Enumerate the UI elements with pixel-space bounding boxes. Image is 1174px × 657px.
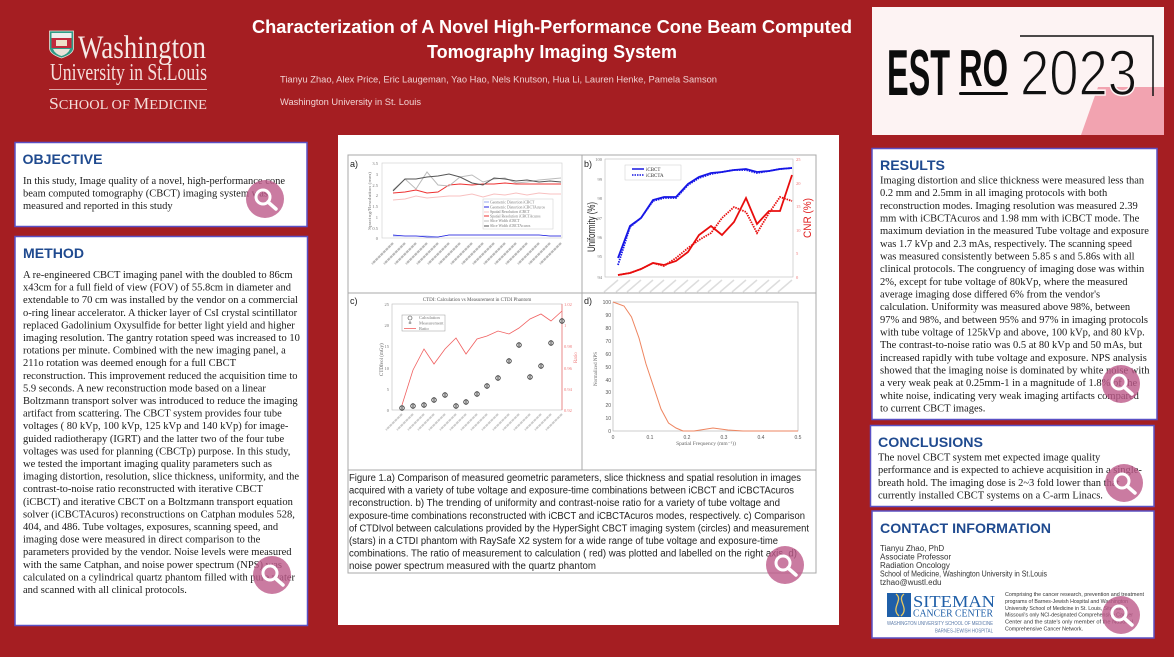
contact details: Associate Professor	[880, 552, 951, 562]
chart a: geometric parameters: Slice Width iCBCTAcuros	[490, 224, 531, 228]
logo: ESTRO 2023	[872, 7, 1164, 135]
heading: conclusions: CONCLUSIONS	[878, 434, 983, 450]
chart d: noise power spectrum	[584, 296, 802, 447]
logo: Siteman Cancer Center: CANCER CENTER	[913, 608, 993, 620]
icon: magnifier, objective	[246, 180, 284, 218]
figure caption: combinations. The ratio of measurement to calculation ( red) was plotted and labelled on the right axis. d)	[349, 549, 797, 560]
contact details: Radiation Oncology	[880, 561, 950, 570]
chart d: noise power spectrum: 60	[605, 352, 611, 358]
icon: magnifier, contact	[1102, 596, 1140, 634]
chart a: geometric parameters: Geometric Distortion iCBCTAcuros	[490, 206, 545, 210]
chart a: geometric parameters: Spatial Resolution iCBCT	[490, 210, 531, 214]
chart d: noise power spectrum: 90	[605, 313, 611, 319]
results text: to current CBCT images.	[880, 404, 985, 415]
objective text: measured and reported in this study	[23, 201, 173, 212]
results text: calculation. Uniformity was measured above 98%, between	[880, 302, 1131, 313]
chart a: geometric parameters: 1.5	[372, 204, 379, 209]
chart c: CTDI calculation vs measurement: 20	[384, 323, 390, 328]
method text: reconstruction. This improvement reduced the acquisition time to	[23, 371, 298, 382]
heading: results: RESULTS	[880, 157, 945, 173]
results text: 97% and 98%, and between 95% and 97% in imaging protocols	[880, 315, 1148, 326]
chart c: CTDI calculation vs measurement: 0	[387, 408, 390, 413]
results text: 2%, except for tube voltage of 80kVp, where the measured	[880, 277, 1128, 288]
results text: with tube voltage of 125kVp and above, 100 kVp, and 80 kVp.	[880, 328, 1145, 339]
chart c: CTDI calculation vs measurement	[350, 296, 579, 430]
Siteman description: Comprehensive Cancer Network.	[1005, 626, 1083, 632]
chart c: CTDI calculation vs measurement: 5	[387, 387, 390, 392]
method text: (iCBCT) and iterative CBCT on a Boltzmann transport equation	[23, 497, 294, 508]
chart b: uniformity and CNR	[584, 157, 814, 292]
chart b: uniformity and CNR: Uniformity (%)	[586, 202, 598, 252]
chart b: uniformity and CNR: 98	[598, 196, 603, 201]
chart d: noise power spectrum: 20	[605, 403, 611, 409]
results text: 0.2 mm and 2.5mm in all imaging protocols with both	[880, 188, 1108, 199]
chart c: CTDI calculation vs measurement: Ratio	[419, 326, 429, 331]
panel: method	[15, 236, 308, 626]
logo: Siteman Cancer Center: SITEMAN	[913, 592, 995, 611]
chart d: noise power spectrum: 0.3	[721, 435, 728, 441]
title: Tomography Imaging System	[427, 42, 677, 62]
icon: magnifier, conclusions	[1105, 464, 1143, 502]
method text: 5.9 seconds. A new reconstruction mode based on a linear	[23, 383, 266, 394]
chart a: geometric parameters: Spacing/Resolution (mm)	[367, 171, 372, 230]
chart d: noise power spectrum: 0.1	[647, 435, 654, 441]
chart b: uniformity and CNR: 20	[796, 181, 801, 186]
figure caption: reconstruction. b) The trending of uniformity and contrast-noise ratio for a variety of tube voltage and	[349, 498, 780, 509]
icon: magnifier, method	[253, 556, 291, 594]
chart c: CTDI calculation vs measurement: CTDIvol (mGy)	[380, 343, 385, 376]
results text: was measured consistently between 5.85 s and 5.86s with all	[880, 252, 1135, 263]
method text: we tested the important imaging quality parameters such as	[23, 459, 272, 470]
method text: Boltzmann transport solver was introduced to reduce the imaging	[23, 396, 298, 407]
authors: Tianyu Zhao, Alex Price, Eric Laugeman, Yao Hao, Nels Knutson, Hua Li, Lauren Henke, Pamela Samson	[280, 74, 717, 84]
chart c: CTDI calculation vs measurement: 10	[384, 366, 390, 371]
chart d: noise power spectrum: 0.4	[758, 435, 765, 441]
Siteman description: Missouri's only NCI-designated Comprehensive Cancer	[1005, 612, 1133, 618]
chart c: CTDI calculation vs measurement: Calculation	[419, 315, 440, 320]
chart b: uniformity and CNR: iCBCTA	[646, 174, 664, 179]
chart d: noise power spectrum: 0.5	[795, 435, 802, 441]
chart c: CTDI calculation vs measurement: c)	[350, 296, 358, 306]
figure caption: Figure 1.a) Comparison of measured geometric parameters, slice thickness and spatial resolution in images	[349, 473, 801, 484]
conclusions text: breath hold. The imaging dose is 2~3 fold lower than that	[878, 478, 1119, 489]
method text: imaging dose were measured in direct comparison to the	[23, 535, 261, 546]
chart b: uniformity and CNR: 96	[598, 235, 603, 240]
logo: ESTRO 2023: RO	[959, 40, 1008, 98]
logo: Siteman Cancer Center: BARNES-JEWISH HOSPITAL	[935, 628, 993, 634]
heading: objective: OBJECTIVE	[22, 151, 102, 167]
chart d: noise power spectrum: 40	[605, 378, 611, 384]
chart b: uniformity and CNR: 94	[598, 275, 603, 280]
chart c: CTDI calculation vs measurement: 0.94	[564, 387, 573, 392]
chart d: noise power spectrum: Normalized NPS	[594, 352, 599, 386]
chart a: geometric parameters	[350, 159, 562, 264]
chart a: geometric parameters: a)	[350, 159, 358, 169]
figure caption: of CTDIvol between calculations provided by the HyperSight CBCT imaging system (circles) and measurement	[349, 523, 809, 534]
chart c: CTDI calculation vs measurement: 0.92	[564, 408, 572, 413]
chart d: noise power spectrum: 50	[605, 365, 611, 371]
method text: A re-engineered CBCT imaging panel with the doubled to 86cm	[23, 270, 293, 281]
chart c: CTDI calculation vs measurement: CTDI: Calculation vs Measurement in CTDI Phantom	[423, 298, 531, 303]
method text: imaging distortion, resolution, slice thickness, uniformity, and the	[23, 472, 299, 483]
contact details: tzhao@wustl.edu	[880, 578, 942, 587]
method text: imaging resolution. The gantry rotation speed was increased to 10	[23, 333, 300, 344]
chart b: uniformity and CNR: 97	[598, 216, 603, 221]
chart b: uniformity and CNR: 99	[598, 177, 603, 182]
conclusions text: performance and is expected to achieve acquisition in a single-	[878, 465, 1142, 476]
chart c: CTDI calculation vs measurement: 25	[384, 302, 390, 307]
figure caption: noise power spectrum measured with the quartz phantom	[349, 561, 596, 572]
figure caption: acquired with a variety of tube voltage and exposure-time combinations between iCBCT and iCBCTAcuros	[349, 486, 794, 497]
contact details: Tianyu Zhao, PhD	[880, 544, 944, 553]
method text: o-ring linear accelerator. A thicker layer of CsI crystal scintillator	[23, 308, 298, 319]
icon: magnifier, figure	[766, 546, 804, 584]
conclusions text: The novel CBCT system met expected image quality	[878, 452, 1101, 464]
results text: The contrast-to-noise ratio was 0.5 at 80 kVp and 50 mAs, but	[880, 340, 1142, 351]
method text: with the same Catphan, and noise power spectrum (NPS) was	[23, 560, 282, 571]
results text: increased rapidly with tube voltage and exposure. NPS analysis	[880, 353, 1147, 364]
logo: Siteman Cancer Center	[887, 592, 995, 634]
method text: solver (iCBCTAcuros) reconstructions on Catphan modules 528,	[23, 509, 295, 520]
logo: ESTRO 2023: EST	[887, 36, 950, 109]
method text: guided radiotherapy (IGRT) and the latter two of the four tube	[23, 434, 285, 445]
chart a: geometric parameters: 0.5	[372, 226, 379, 231]
method text: and scanned with all clinical protocols.	[23, 585, 187, 596]
results text: reconstruction modes. Imaging resolution was measured 2.39	[880, 201, 1138, 212]
figure caption: (stars) in a CTDI phantom with RaySafe X2 system for a wide range of tube voltage and exposure-time	[349, 536, 778, 547]
results text: a very weak peak at 0.25mm-1 in a magnitude of 1.8% of the	[880, 378, 1138, 389]
results text: white noise, indicating very weak imaging artifacts compared	[880, 391, 1140, 402]
chart d: noise power spectrum: 0	[612, 435, 615, 441]
chart a: geometric parameters: 1	[376, 215, 378, 220]
chart a: geometric parameters: 2.5	[372, 183, 379, 188]
method text: artifact from scattering. The CBCT system provides four tube	[23, 409, 282, 420]
title: Characterization of A Novel High-Performance Cone Beam Computed	[252, 17, 852, 37]
chart d: noise power spectrum: 70	[605, 339, 611, 345]
results text: was 1.7 kVp and 2.3 mAs, respectively. The scanning speed	[880, 239, 1133, 250]
chart b: uniformity and CNR: 0	[796, 275, 799, 280]
Siteman description: Comprising the cancer research, prevention and treatment	[1005, 592, 1145, 598]
method text: rotations per minute. Combined with the new imaging panel, a	[23, 346, 286, 357]
method text: 211o rotation was deemed enough for a full CBCT	[23, 358, 237, 369]
objective text: In this study, Image quality of a novel, high-performance cone	[23, 176, 285, 187]
title	[252, 17, 852, 62]
chart c: CTDI calculation vs measurement: Measurement	[419, 320, 444, 326]
chart c: CTDI calculation vs measurement: Ratio	[574, 352, 579, 363]
Siteman description: Center and the state's only member of the National	[1005, 620, 1133, 626]
logo: Siteman Cancer Center: WASHINGTON UNIVERSITY SCHOOL OF MEDICINE	[887, 621, 994, 627]
logo: Washington University School of Medicine: University in St.Louis	[50, 60, 207, 86]
chart c: CTDI calculation vs measurement: 0.96	[564, 366, 573, 371]
chart b: uniformity and CNR: iCBCT	[646, 168, 660, 173]
chart b: uniformity and CNR: 100	[595, 157, 603, 162]
heading: contact information: CONTACT INFORMATION	[880, 520, 1051, 536]
contact details: School of Medicine, Washington University in St.Louis	[880, 570, 1047, 578]
chart d: noise power spectrum: 100	[603, 300, 611, 306]
results text: mm with iCBCTAcuros and 1.98 mm with iCBCT mode. The	[880, 214, 1140, 225]
chart c: CTDI calculation vs measurement: 15	[384, 344, 390, 349]
chart d: noise power spectrum: Spatial Frequency (mm⁻¹))	[676, 440, 736, 447]
logo: ESTRO 2023: 2023	[1020, 37, 1137, 109]
chart d: noise power spectrum: 0	[608, 429, 611, 435]
logo: Washington University School of Medicine	[49, 30, 207, 113]
panel: results	[872, 148, 1157, 420]
method text: replaced Gadolinium Oxysulfide for better light yield and higher	[23, 320, 295, 331]
Siteman description: University School of Medicine in St. Louis, Siteman is	[1005, 606, 1128, 612]
results text: maximum deviation in the measured Tube voltage and exposure	[880, 226, 1149, 237]
method text: x43cm for a full field of view (FOV) of 55.8cm in diameter and	[23, 283, 292, 294]
panel: conclusions	[870, 426, 1154, 506]
affiliation: Washington University in St. Louis	[280, 97, 422, 107]
conclusions text: currently installed CBCT systems on a C-arm Linacs.	[878, 491, 1103, 502]
chart a: geometric parameters: Geometric Distortion iCBCT	[490, 200, 535, 204]
icon: university shield	[50, 31, 74, 58]
logo: Washington University School of Medicine: SCHOOL OF MEDICINE	[49, 94, 207, 113]
panel: figure	[338, 135, 839, 625]
chart d: noise power spectrum: 0.2	[684, 435, 691, 441]
objective text: beam computed tomography (CBCT) imaging system was	[23, 189, 268, 200]
results text: showed that the imaging noise is dominated by white noise with	[880, 366, 1150, 377]
method text: parameters provided by the vendor. Noise levels were measured	[23, 547, 292, 558]
chart c: CTDI calculation vs measurement: 1.02	[564, 302, 572, 307]
panel: contact information	[872, 511, 1154, 638]
figure caption: exposure-time combinations reconstructed with iCBCT and iCBCTAcuros modes, respectively. c) Comparison	[349, 511, 805, 522]
chart d: noise power spectrum: 10	[605, 416, 611, 422]
results text: Imaging distortion and slice thickness were measured less than	[880, 176, 1145, 186]
panel: objective	[15, 142, 307, 226]
chart b: uniformity and CNR: b)	[584, 159, 592, 169]
icon: magnifier, results	[1102, 365, 1140, 403]
chart d: noise power spectrum: 30	[605, 390, 611, 396]
results text: average imaging dose differed 6% from the vendor's	[880, 290, 1100, 301]
Siteman description: programs of Barnes-Jewish Hospital and Washington	[1005, 599, 1128, 605]
results text: clinical protocols. The congruency of imaging dose was within	[880, 264, 1145, 275]
chart a: geometric parameters: 2	[376, 193, 378, 198]
method text: extendable to 70 cm was installed by the vendor on a commercial	[23, 295, 298, 306]
heading: method: METHOD	[23, 245, 84, 261]
chart b: uniformity and CNR: CNR (%)	[802, 198, 814, 238]
chart d: noise power spectrum: d)	[584, 296, 592, 306]
chart b: uniformity and CNR: 95	[598, 254, 603, 259]
chart c: CTDI calculation vs measurement: 1	[564, 323, 566, 328]
chart a: geometric parameters: Slice Width iCBCT	[490, 219, 520, 223]
chart b: uniformity and CNR: 5	[796, 251, 799, 256]
chart a: geometric parameters: 0	[376, 236, 379, 241]
chart d: noise power spectrum: 80	[605, 326, 611, 332]
logo: Washington University School of Medicine: Washington	[78, 30, 206, 66]
method text: calculated on a cylindrical quartz phantom filled with pure water	[23, 572, 296, 583]
chart c: CTDI calculation vs measurement: 0.98	[564, 344, 573, 349]
chart b: uniformity and CNR: 25	[796, 157, 801, 162]
method text: contrast-to-noise ratio reconstructed with iterative CBCT	[23, 484, 264, 495]
method text: voltages was used for planning (CBCTp) purpose. In this study,	[23, 446, 290, 457]
chart a: geometric parameters: Spatial Resolution iCBCTAcuros	[490, 214, 541, 218]
method text: voltages ( 80 kVp, 100 kVp, 125 kVp and 140 kVp) for image-	[23, 421, 289, 432]
chart b: uniformity and CNR: 10	[796, 228, 801, 233]
method text: 404, and 486. Tube voltages, exposures, scanning speed, and	[23, 522, 279, 533]
chart b: uniformity and CNR: 15	[796, 204, 801, 209]
chart a: geometric parameters: 3.5	[372, 161, 379, 166]
chart a: geometric parameters: 3	[376, 172, 379, 177]
